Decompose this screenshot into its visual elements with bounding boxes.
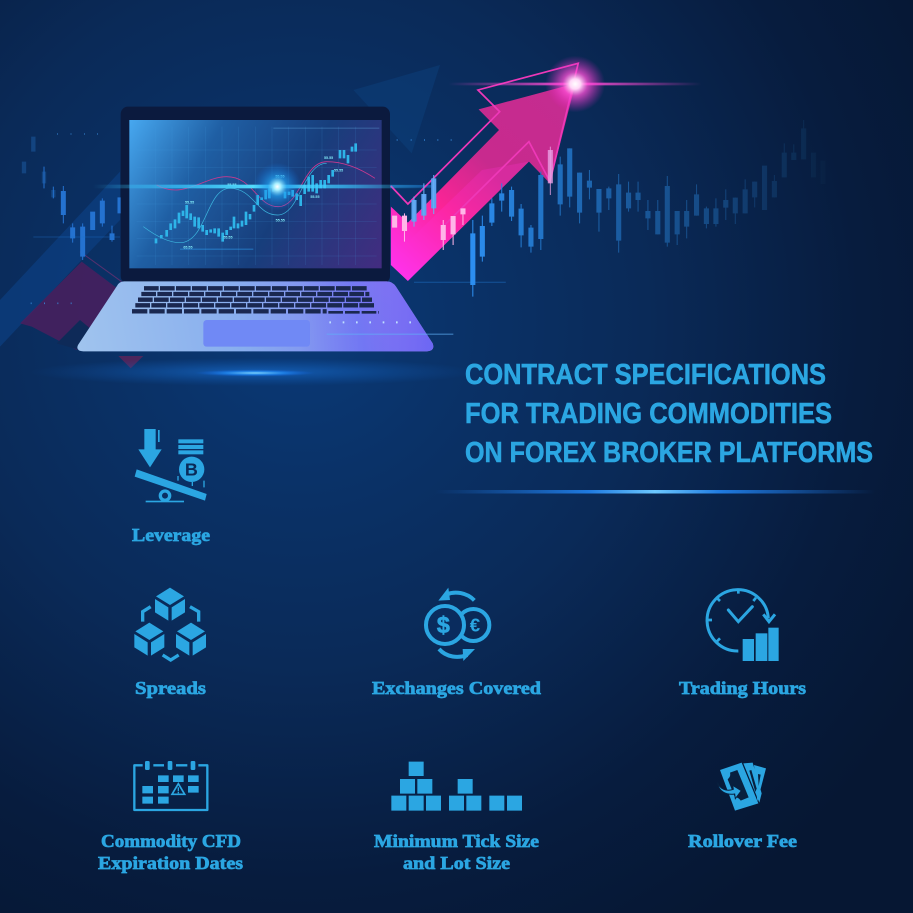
title: FOR TRADING COMMODITIES: [465, 398, 832, 430]
background decorative shapes and left candlesticks: [0, 65, 452, 368]
laptop floor glow: [30, 358, 480, 386]
screen data labels: 55.55: [276, 219, 285, 223]
label: trading hours: Trading Hours: [679, 678, 806, 698]
icon: three cubes: [134, 588, 206, 660]
label: leverage: Leverage: [132, 525, 210, 545]
laptop base: [77, 281, 433, 351]
label: exchanges covered: Exchanges Covered: [372, 678, 541, 698]
icon: currency exchange: $: [437, 612, 450, 638]
screen data labels: 55.55: [310, 195, 319, 199]
base dots and highlight: [329, 319, 411, 325]
label: commodity CFD expiration dates: [98, 831, 243, 873]
screen flare: [93, 185, 427, 188]
screen data labels: 55.55: [185, 200, 194, 204]
icon: stacked blocks: [391, 762, 522, 811]
candles over the arrow: [543, 150, 558, 183]
screen data labels: 55.55: [334, 169, 343, 173]
screen data labels: 55.55: [275, 175, 284, 179]
screen data labels: 65.55: [183, 245, 192, 249]
title rule: [435, 490, 875, 494]
item: exchanges covered: [372, 588, 541, 698]
label: spreads: Spreads: [135, 678, 206, 698]
item: trading hours: [679, 589, 806, 698]
screen data labels: [183, 156, 343, 249]
icon: currency exchange: €: [470, 615, 481, 636]
keyboard: [132, 288, 379, 312]
label: minimum tick size and lot size: [374, 831, 539, 873]
label: minimum tick size and lot size: and Lot Size: [403, 853, 510, 873]
label: commodity CFD expiration dates: Commodity CFD: [101, 831, 241, 851]
label: minimum tick size and lot size: Minimum Tick Size: [374, 831, 539, 851]
laptop screen: [129, 120, 382, 268]
item: leverage: [132, 429, 210, 545]
screen candlesticks: [156, 143, 356, 243]
title: [465, 359, 873, 469]
item: minimum tick size and lot size: [374, 762, 539, 873]
screen data labels: 55.55: [324, 156, 333, 160]
pink growth arrow with outline: [380, 56, 823, 297]
icon: seesaw with arrow and coin: B: [185, 460, 198, 480]
icon: currency exchange: [426, 588, 489, 661]
trackpad: [203, 320, 310, 347]
icon: banknotes with return arrow: [718, 763, 766, 811]
screen curves: [157, 162, 375, 207]
item: spreads: [134, 588, 206, 698]
item: rollover fee: [688, 763, 797, 851]
label: rollover fee: Rollover Fee: [688, 831, 797, 851]
item: commodity CFD expiration dates: [98, 761, 243, 873]
laptop lid and bezel: [121, 107, 390, 283]
title: CONTRACT SPECIFICATIONS: [465, 359, 826, 391]
screen data labels: 55.55: [223, 236, 232, 240]
screen data labels: 55.55: [227, 183, 236, 187]
icon: calendar with warning: [134, 761, 207, 810]
screen grid: [137, 127, 377, 265]
laptop: [77, 107, 453, 351]
icon: clock with bars: [707, 589, 779, 661]
right candlestick chart: [473, 120, 823, 297]
label: commodity CFD expiration dates: Expiration Dates: [98, 853, 243, 873]
